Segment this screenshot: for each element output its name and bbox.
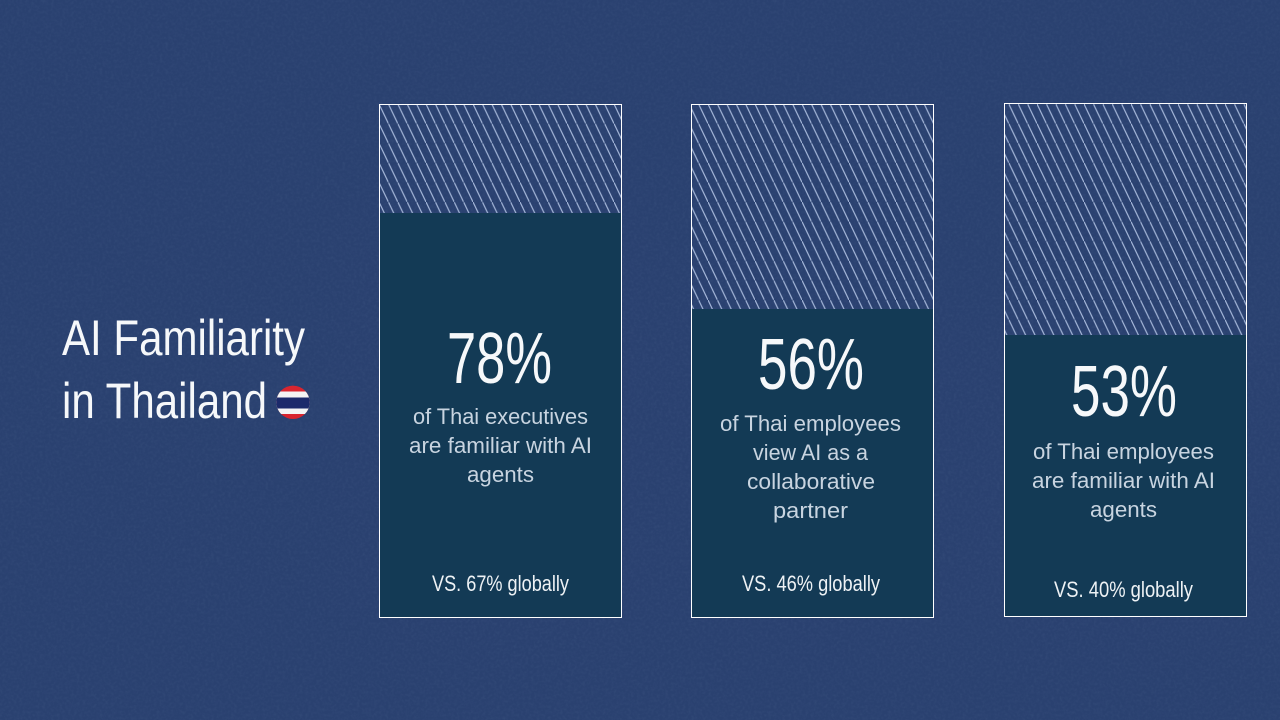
stat: 78%: 78%: [447, 319, 552, 399]
filled bar: [692, 309, 933, 617]
hatched remainder: [1005, 104, 1246, 335]
panel: collaborative partner 56%: [692, 104, 934, 618]
description: collaborative: [747, 469, 875, 494]
description: [409, 404, 592, 487]
global comparison: VS. 40% globally: [1054, 577, 1193, 602]
description: view AI as a: [753, 440, 869, 465]
description: of Thai employees: [1033, 439, 1214, 464]
description: of Thai employees: [720, 411, 901, 436]
global comparison: VS. 67% globally: [432, 571, 569, 596]
description: of Thai executives: [413, 404, 588, 429]
stat: 56%: 56%: [758, 325, 864, 405]
title: in Thailand: [62, 373, 267, 429]
panel outline: [692, 104, 934, 618]
description: agents: [467, 462, 534, 487]
description: partner: [773, 498, 848, 523]
panel: employees familiar 53%: [1004, 104, 1246, 616]
description: agents: [1090, 497, 1157, 522]
filled bar: [1005, 335, 1246, 616]
filled bar: [380, 213, 621, 617]
global comparison: VS. 46% globally: [742, 571, 880, 596]
description: [1032, 439, 1215, 522]
stat: 53%: 53%: [1071, 352, 1177, 432]
hatched remainder: [692, 105, 933, 309]
description: [720, 411, 901, 523]
title: [62, 310, 305, 429]
description: are familiar with AI: [1032, 468, 1215, 493]
icon: Thai flag: [276, 385, 310, 420]
description: are familiar with AI: [409, 433, 592, 458]
panel outline: [1004, 104, 1246, 616]
hatched remainder: [380, 105, 621, 213]
panel: executives 78%: [380, 104, 622, 618]
panel outline: [380, 104, 622, 618]
title: AI Familiarity: [62, 310, 305, 366]
